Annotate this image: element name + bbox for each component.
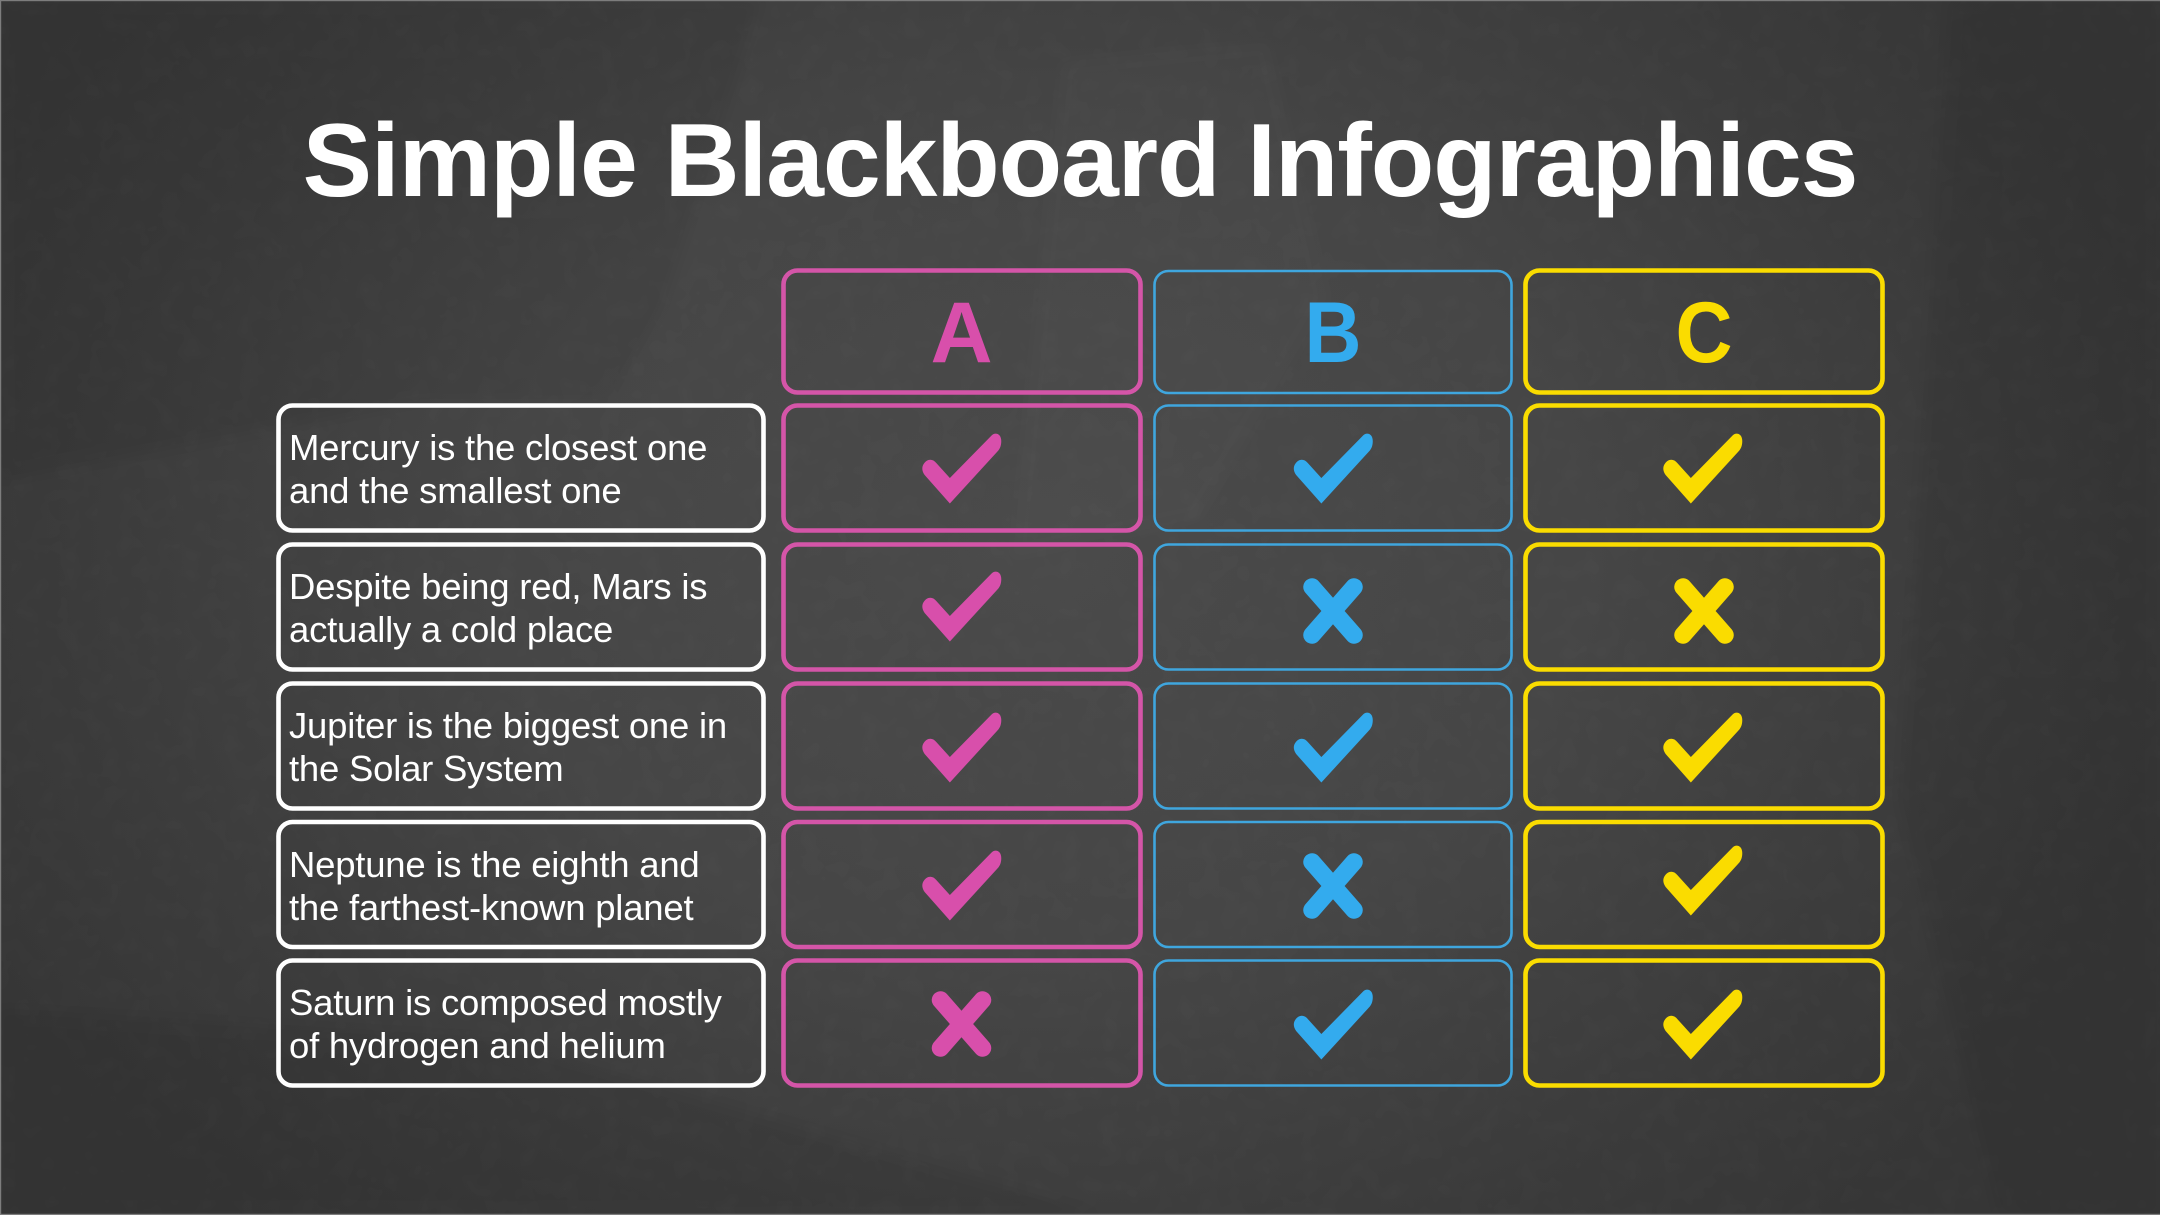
label: Mars: Despite being red, Mars is: [289, 566, 707, 607]
cell C: check: [1526, 960, 1882, 1086]
header C: C: [1676, 285, 1732, 381]
row 2: Mars: [278, 544, 1882, 670]
label: Mercury: Mercury is the closest one: [289, 427, 707, 468]
title: Simple Blackboard Infographics: [303, 103, 1857, 219]
label: Neptune: the farthest-known planet: [289, 887, 693, 928]
cell C: check: [1526, 684, 1882, 808]
cell B: check: [1154, 684, 1512, 808]
cell A: check: [784, 544, 1140, 670]
row 5: Saturn: [278, 960, 1882, 1086]
header B: B: [1304, 285, 1362, 381]
label: Mars: [278, 544, 764, 670]
label: Saturn: of hydrogen and helium: [289, 1025, 666, 1066]
header A: A: [930, 285, 993, 381]
header A: [784, 270, 1140, 392]
row 1: Mercury: [278, 406, 1882, 530]
label: Jupiter: the Solar System: [289, 748, 563, 789]
cell B: check: [1154, 406, 1512, 530]
cell B: cross: [1154, 544, 1512, 670]
header B: [1154, 271, 1512, 393]
cell A: check: [784, 406, 1140, 530]
cell A: cross: [784, 960, 1140, 1086]
label: Neptune: Neptune is the eighth and: [289, 844, 700, 885]
cell B: check: [1154, 960, 1512, 1086]
label: Jupiter: [278, 684, 764, 808]
cell A: check: [784, 822, 1140, 947]
cell C: check: [1526, 406, 1882, 530]
header C: [1526, 270, 1882, 392]
row 3: Jupiter: [278, 684, 1882, 808]
cell B: cross: [1154, 822, 1512, 947]
label: Saturn: [278, 960, 764, 1086]
label: Mercury: and the smallest one: [289, 470, 621, 511]
label: Jupiter: Jupiter is the biggest one in: [289, 705, 727, 746]
cell A: check: [784, 684, 1140, 808]
label: Neptune: [278, 822, 764, 947]
cell C: check: [1526, 822, 1882, 947]
row 4: Neptune: [278, 822, 1882, 947]
label: Saturn: Saturn is composed mostly: [289, 982, 723, 1023]
label: Mercury: [278, 406, 764, 530]
label: Mars: actually a cold place: [289, 609, 613, 650]
cell C: cross: [1526, 544, 1882, 670]
